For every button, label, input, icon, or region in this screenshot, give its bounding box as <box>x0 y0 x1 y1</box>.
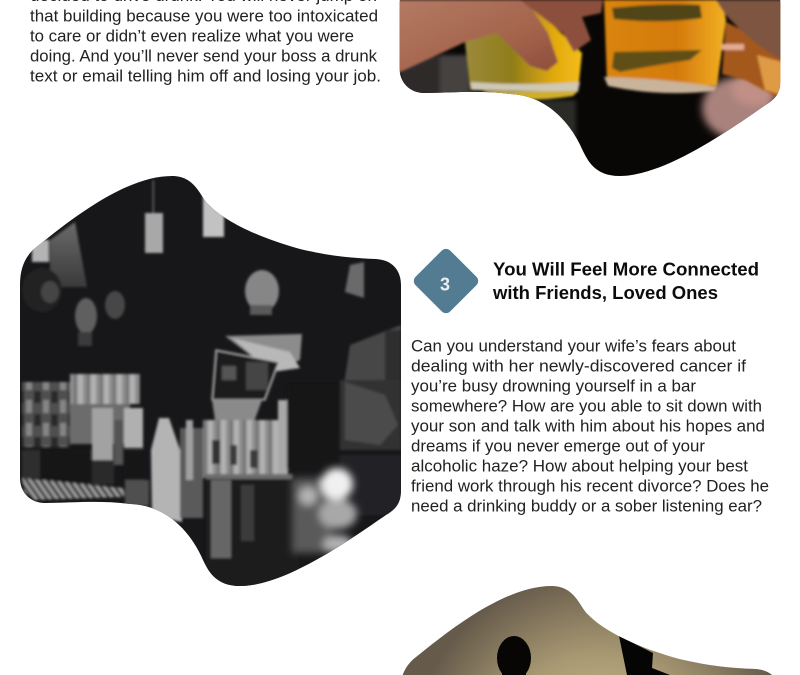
silhouette: raised arm <box>619 636 670 675</box>
heading: section 3 <box>492 260 759 303</box>
body text: section 3 paragraph: somewhere? How are you able to sit down with <box>411 398 762 416</box>
glass rack <box>70 374 140 404</box>
blurred face <box>702 77 774 139</box>
people <box>22 268 62 312</box>
body text: section 3 paragraph: your son and talk with him about his hopes and <box>411 418 765 436</box>
body text: section 3 paragraph: friend work through his recent divorce? Does he <box>411 478 769 496</box>
bokeh lights <box>292 478 332 553</box>
silhouette: person head <box>497 636 531 675</box>
body text: top left paragraph: to care or didn’t even realize what you were <box>30 28 354 46</box>
heading: section 3: with Friends, Loved Ones <box>492 283 718 303</box>
body text: section 3 paragraph <box>411 338 769 516</box>
number badge 3: 3 <box>440 274 450 294</box>
menu <box>212 350 279 400</box>
body text: section 3 paragraph: need a drinking buddy or a sober listening ear? <box>411 498 762 516</box>
wall and lamps <box>50 222 87 287</box>
body text: section 3 paragraph: dealing with her newly-discovered cancer if <box>411 358 746 376</box>
metal bucket <box>206 474 300 590</box>
body text: top left paragraph: that building because you were too intoxicated <box>30 8 378 26</box>
left hand <box>396 0 558 74</box>
photo: silhouettes at sunset <box>402 586 772 675</box>
body text: top left paragraph: doing. And you’ll never send your boss a drunk <box>30 48 378 66</box>
bottles and bar <box>22 382 70 447</box>
right glass <box>604 0 726 86</box>
body text: section 3 paragraph: you’re busy drowning yourself in a bar <box>411 378 697 396</box>
photo: two beer glasses clinking <box>396 0 782 180</box>
body text: section 3 paragraph: alcoholic haze? How about helping your best <box>411 458 748 476</box>
person's arm <box>340 380 401 450</box>
right hand <box>722 22 782 100</box>
body text: section 3 paragraph: Can you understand your wife’s fears about <box>411 338 736 356</box>
left glass <box>465 0 582 92</box>
heading: section 3: You Will Feel More Connected <box>493 260 759 280</box>
number badge 3 <box>411 246 481 316</box>
body text: top left paragraph: text or email telling him off and losing your job. <box>30 68 381 86</box>
body text: section 3 paragraph: dreams if you never emerge out of your <box>411 438 706 456</box>
photo: crowded bar in black and white <box>18 174 404 590</box>
body text: top left paragraph <box>30 0 381 86</box>
